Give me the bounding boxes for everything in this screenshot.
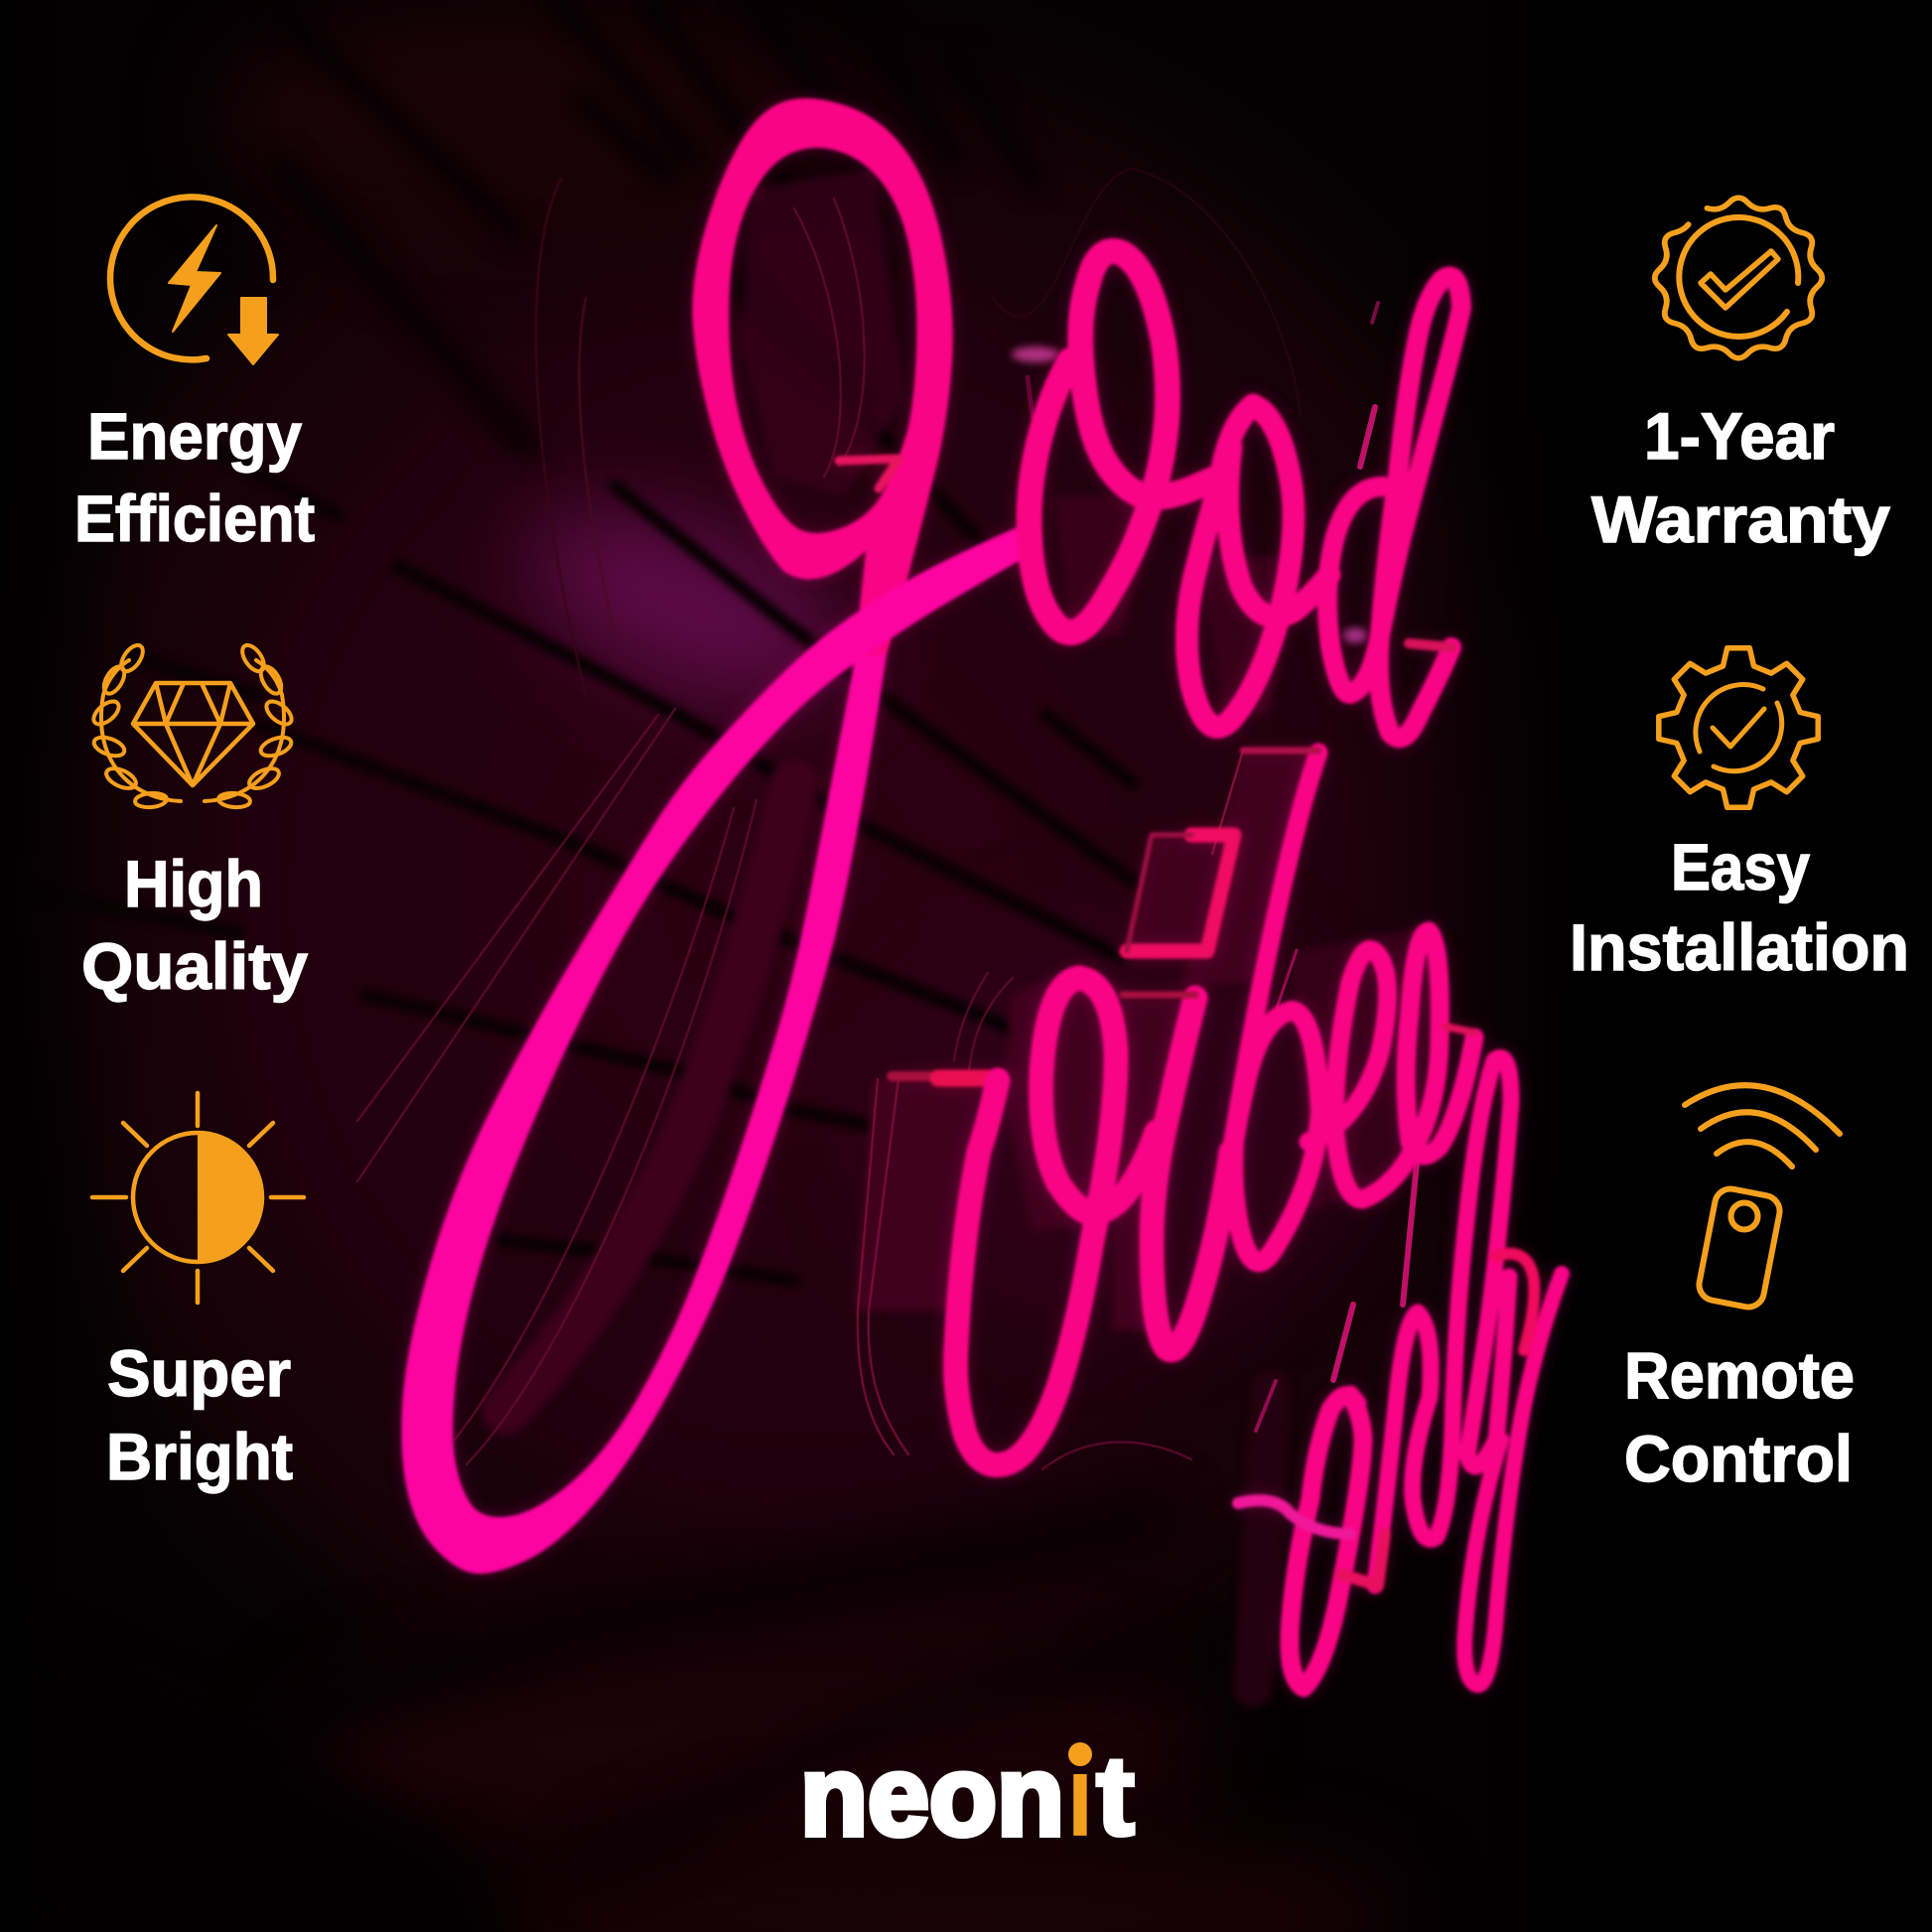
letter: v stroke and first i loop xyxy=(955,978,1157,1465)
label: 1-Year Warranty xyxy=(1591,399,1890,556)
feature: 1-year warranty xyxy=(1591,198,1890,556)
dark diagonal bands at the bottom xyxy=(0,1521,1152,1932)
letter: i dot dim edge xyxy=(1127,835,1191,951)
logo: neonit: t xyxy=(1096,1733,1135,1860)
icon: diamond with laurel wreath xyxy=(89,641,296,808)
label: 1-Year Warranty: Warranty xyxy=(1591,483,1890,556)
letter: i dot rectangle xyxy=(1127,835,1234,951)
letter: y long tail xyxy=(1464,1274,1562,1685)
label: Remote Control: Control xyxy=(1624,1422,1853,1495)
letter: first o xyxy=(1029,251,1215,632)
label: Energy Efficient: Energy xyxy=(87,399,302,473)
left column features xyxy=(74,197,315,1493)
right column features xyxy=(1570,198,1909,1495)
label: Energy Efficient xyxy=(74,399,315,555)
letter: g tail inside the ring xyxy=(839,459,898,488)
letter: second o xyxy=(1186,405,1329,727)
letter: y top hook xyxy=(1496,1254,1534,1350)
letter: e and s xyxy=(1309,931,1474,1199)
letter: big script g swoosh, loop and lower descender xyxy=(401,523,1028,1574)
letter: o of only xyxy=(1290,1395,1363,1688)
label: High Quality: Quality xyxy=(81,929,308,1003)
letter: b top dim bar xyxy=(1243,747,1318,755)
letter: i stem xyxy=(1152,998,1231,1350)
label: Super Bright: Bright xyxy=(106,1420,293,1493)
feature: super bright xyxy=(92,1093,304,1493)
logo: neonit: neon xyxy=(800,1733,1064,1860)
letter: d tail xyxy=(1409,643,1451,647)
label: Easy Installation xyxy=(1570,830,1909,984)
icon: lightning bolt with down arrow xyxy=(110,197,278,364)
letter: n and l of only xyxy=(1375,1058,1511,1586)
label: Easy Installation: Easy xyxy=(1671,830,1810,903)
letter: n hook of only xyxy=(1342,1534,1385,1586)
label: Super Bright: Super xyxy=(107,1336,291,1410)
logo: neonit xyxy=(804,1742,1136,1839)
letter: crossbar of only xyxy=(1238,1500,1350,1534)
letter: big script g ring and descender xyxy=(692,98,953,662)
feature: energy efficient xyxy=(74,197,315,555)
label: 1-Year Warranty: 1-Year xyxy=(1644,399,1835,473)
icon: gear with check xyxy=(1659,648,1818,807)
soft steep slat shadows along the top xyxy=(281,0,1033,447)
letter: s tail xyxy=(1446,1027,1474,1033)
icon: remote with signal waves xyxy=(1685,1085,1840,1310)
letter: i top bar xyxy=(1123,991,1195,999)
feature: easy installation xyxy=(1570,648,1909,984)
icon: rosette badge with check xyxy=(1655,198,1822,358)
label: Energy Efficient: Efficient xyxy=(74,482,315,555)
label: High Quality xyxy=(81,847,308,1003)
letter: b bowl xyxy=(1233,1011,1320,1262)
icon: half-filled sun xyxy=(92,1093,304,1303)
letter: d xyxy=(1327,276,1461,738)
unlit acrylic backing and hairline tubes behind the letters xyxy=(357,169,1440,1688)
letter: v top bar xyxy=(892,1071,938,1081)
neon sign: good vibes only xyxy=(401,98,1562,1688)
label: Remote Control xyxy=(1624,1338,1855,1495)
label: Remote Control: Remote xyxy=(1624,1338,1855,1412)
slat shadows across the wall xyxy=(40,420,1191,1281)
label: Super Bright xyxy=(106,1336,293,1493)
feature: high quality xyxy=(81,641,308,1003)
feature: remote control xyxy=(1624,1085,1855,1495)
logo: neonit: i xyxy=(1068,1733,1092,1860)
letter: v red corner xyxy=(938,1070,998,1086)
letter: b stem xyxy=(1231,753,1318,1152)
label: High Quality: High xyxy=(124,847,263,920)
label: Easy Installation: Installation xyxy=(1570,910,1909,984)
